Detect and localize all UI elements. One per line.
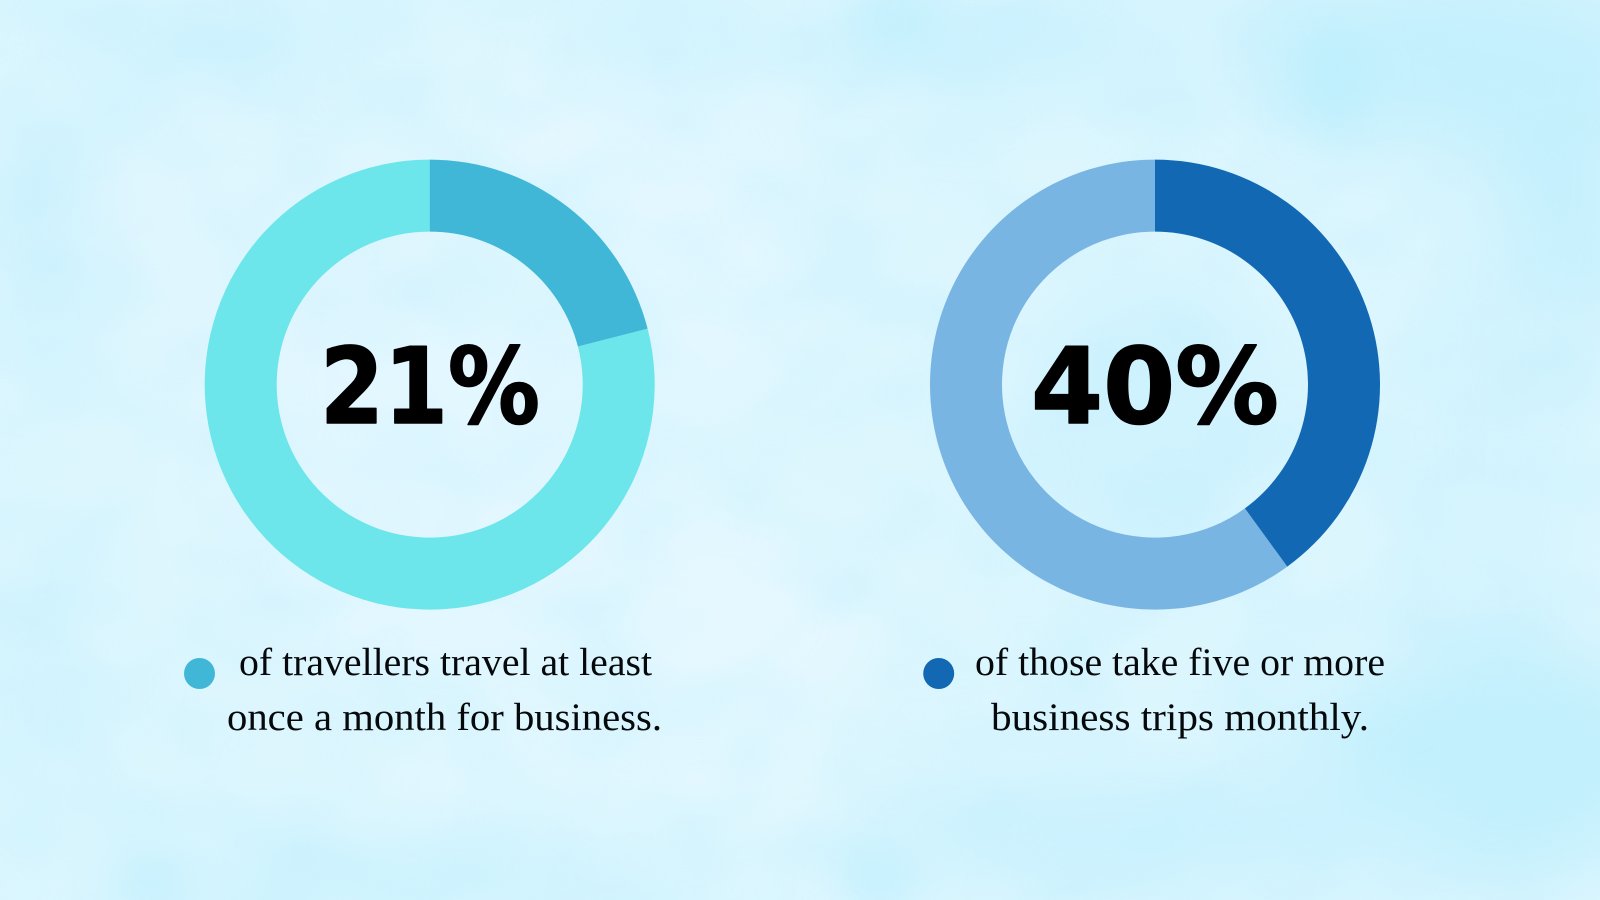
- caption: frequent trips: business trips monthly.: [991, 696, 1369, 739]
- legend: frequent trips: [923, 641, 1385, 739]
- remainder segment: [930, 160, 1287, 610]
- icon: legend dot: [184, 658, 215, 689]
- caption: frequent trips: of those take five or more: [975, 641, 1385, 684]
- caption: travellers: of travellers travel at least: [239, 641, 652, 684]
- value: 21%: 21%: [320, 326, 540, 448]
- 21% segment: [430, 160, 648, 347]
- donut chart: 21% of travellers: [205, 160, 655, 610]
- icon: legend dot: [923, 658, 954, 689]
- caption: travellers: once a month for business.: [227, 696, 662, 739]
- donut chart: 40% of those: [930, 160, 1380, 610]
- legend: travellers: [184, 641, 662, 739]
- 40% segment: [1155, 160, 1380, 567]
- remainder segment: [205, 160, 655, 610]
- value: 40%: 40%: [1031, 326, 1279, 448]
